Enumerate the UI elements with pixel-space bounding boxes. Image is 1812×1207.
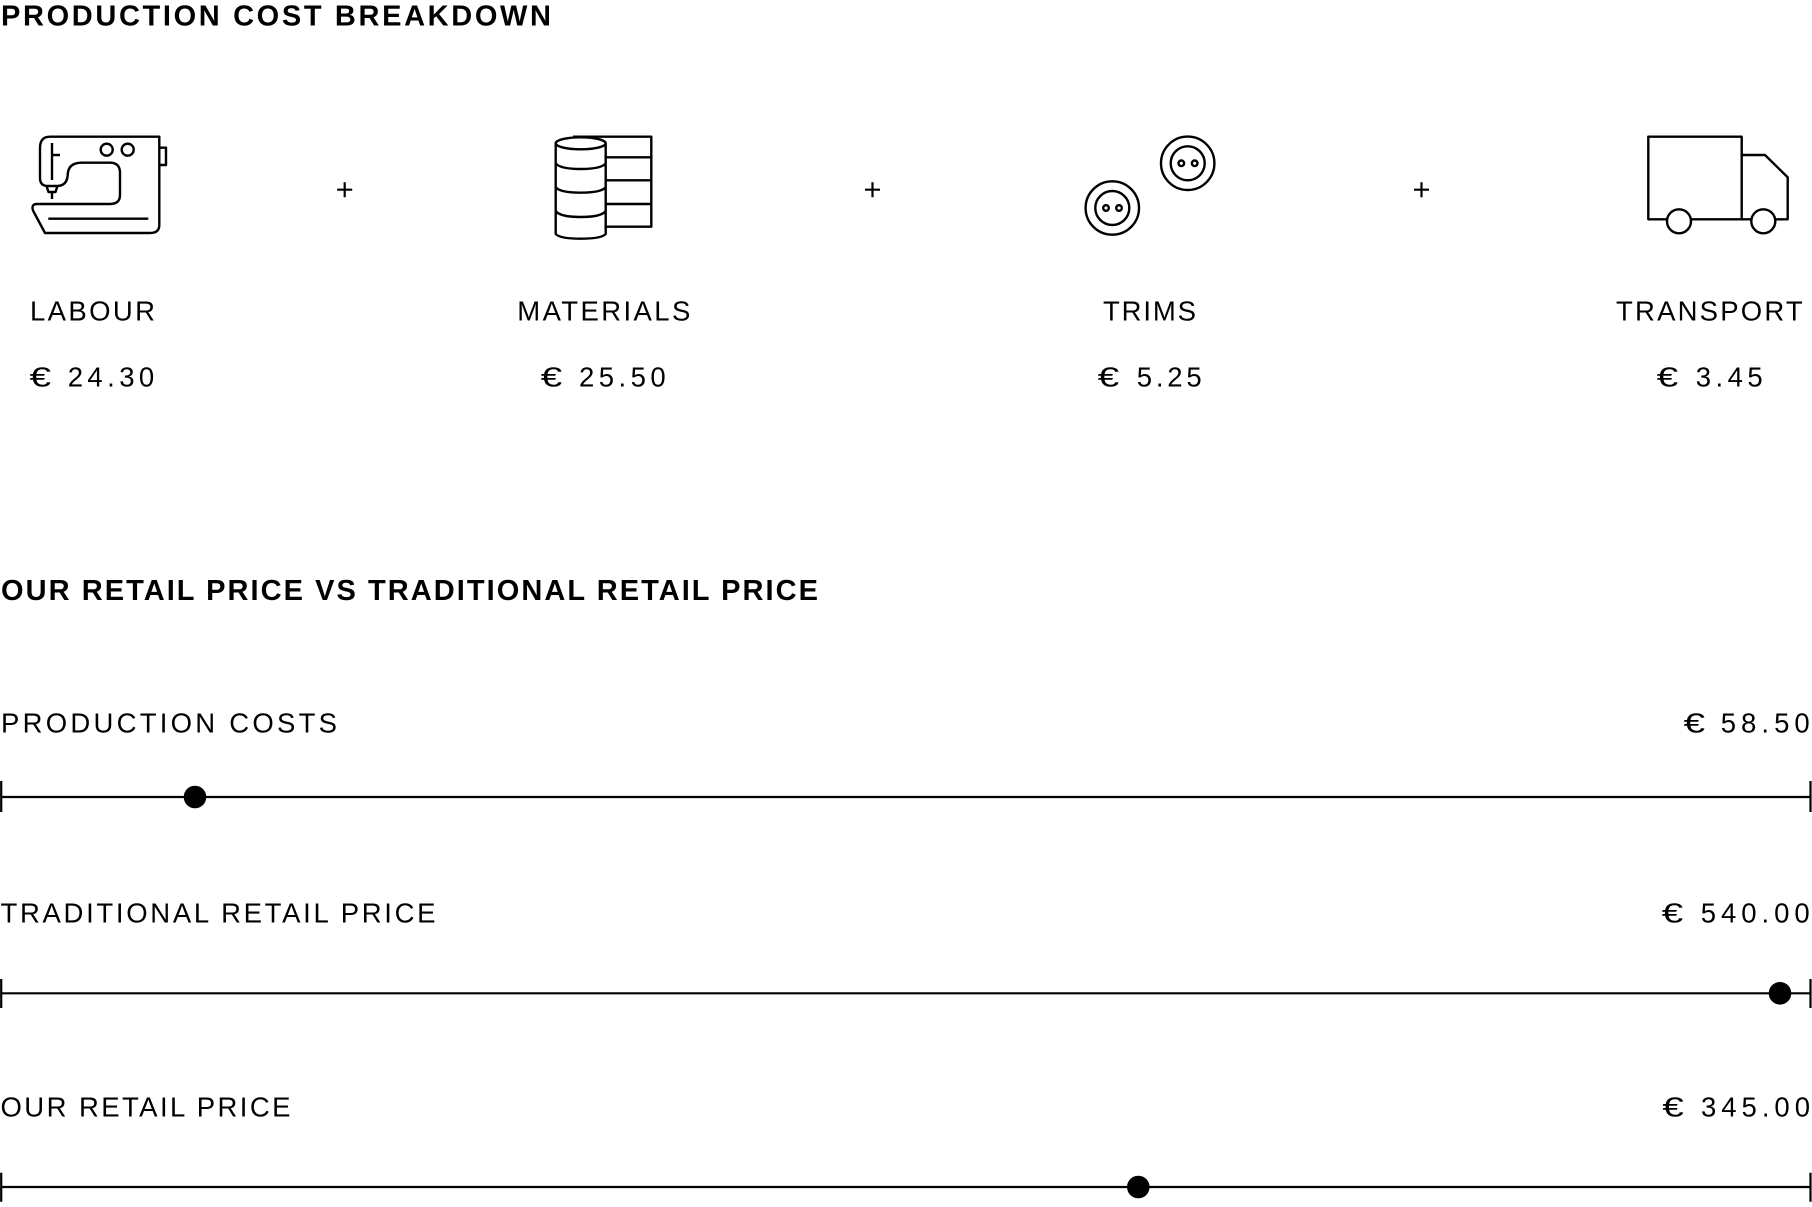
heading: production cost breakdown: PRODUCTION COST BREAKDOWN xyxy=(1,0,551,32)
icon: plus xyxy=(1414,182,1429,197)
panel: production cost breakdown xyxy=(1,0,1803,393)
value: labour cost xyxy=(30,362,154,393)
value: production costs: 58.50 xyxy=(1721,708,1810,739)
marker: our retail price xyxy=(1127,1176,1150,1198)
value: transport cost: € xyxy=(1657,362,1678,393)
label: production costs: PRODUCTION COSTS xyxy=(1,708,337,739)
scale line xyxy=(1,979,1811,1008)
value: transport cost xyxy=(1657,362,1763,393)
marker: traditional retail price xyxy=(1769,982,1791,1005)
row: traditional retail price xyxy=(0,898,1810,1008)
value: traditional retail price: 540.00 xyxy=(1701,898,1810,929)
value: labour cost: 24.30 xyxy=(68,362,154,393)
value: trims cost: 5.25 xyxy=(1137,362,1202,393)
value: our retail price: € xyxy=(1662,1092,1684,1123)
label: labour: LABOUR xyxy=(30,296,155,327)
heading: retail price comparison: OUR RETAIL PRICE VS TRADITIONAL RETAIL PRICE xyxy=(1,575,818,607)
label: traditional retail price: TRADITIONAL RETAIL PRICE xyxy=(0,898,436,929)
scale line xyxy=(1,1173,1811,1202)
value: production costs: € xyxy=(1684,708,1705,739)
icon: truck xyxy=(1648,137,1788,233)
icon: buttons xyxy=(1086,137,1214,235)
value: trims cost xyxy=(1098,362,1202,393)
icon: fabric rolls xyxy=(556,137,651,239)
panel: retail price comparison xyxy=(0,575,1810,1202)
row: our retail price xyxy=(0,1092,1810,1202)
icon: plus xyxy=(337,182,352,197)
row: production costs xyxy=(1,708,1810,812)
icon: sewing machine xyxy=(32,137,166,233)
label: trims: TRIMS xyxy=(1103,296,1196,327)
scale line xyxy=(1,781,1811,812)
value: labour cost: € xyxy=(30,362,51,393)
marker: production costs xyxy=(184,786,206,808)
label: transport: TRANSPORT xyxy=(1616,296,1803,327)
label: materials: MATERIALS xyxy=(517,296,690,327)
value: trims cost: € xyxy=(1098,362,1119,393)
value: materials cost: 25.50 xyxy=(579,362,666,393)
value: traditional retail price: € xyxy=(1662,898,1683,929)
value: our retail price: 345.00 xyxy=(1701,1092,1810,1123)
value: materials cost: € xyxy=(541,362,562,393)
value: materials cost xyxy=(541,362,666,393)
value: transport cost: 3.45 xyxy=(1696,362,1763,393)
label: our retail price: OUR RETAIL PRICE xyxy=(0,1092,290,1123)
icon: plus xyxy=(865,182,880,197)
